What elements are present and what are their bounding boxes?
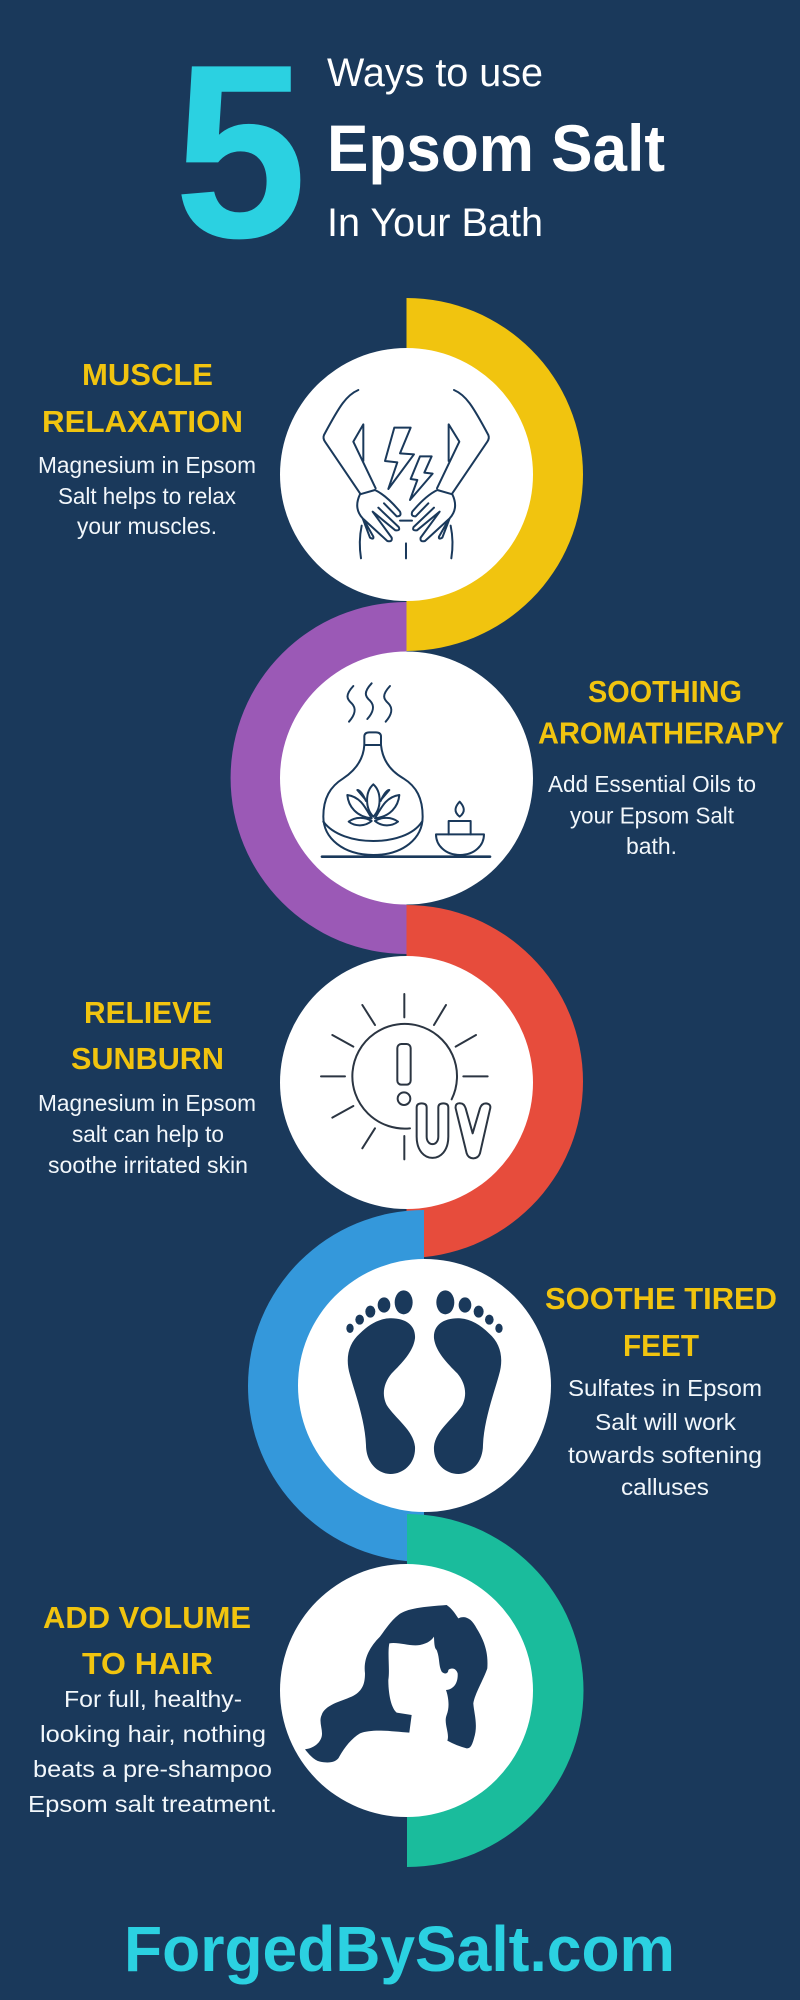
- heading: [42, 357, 243, 439]
- purple half ring: [231, 602, 406, 954]
- white circle: [280, 1564, 533, 1817]
- heading: RELAXATION: [42, 404, 243, 439]
- panel: soothing aromatherapy: [280, 652, 784, 904]
- title line: Epsom Salt: Epsom Salt: [327, 111, 665, 185]
- description: Sulfates in Epsom: [568, 1375, 762, 1401]
- heading: [545, 1281, 777, 1363]
- description: [568, 1375, 762, 1500]
- description: Magnesium in Epsom: [38, 1090, 256, 1116]
- panel: add volume to hair: [28, 1564, 533, 1817]
- description: [38, 452, 256, 539]
- description: [28, 1686, 277, 1817]
- icon: hands on lower back with lightning bolts: [324, 390, 489, 558]
- icon: footprints: [346, 1290, 503, 1474]
- description: your muscles.: [77, 513, 217, 539]
- heading: TO HAIR: [82, 1646, 213, 1681]
- big number 5: 5: [174, 12, 307, 290]
- heading: MUSCLE: [82, 357, 213, 392]
- description: looking hair, nothing: [40, 1721, 266, 1747]
- heading: SUNBURN: [71, 1041, 224, 1076]
- description: beats a pre-shampoo: [33, 1756, 272, 1782]
- heading: SOOTHE TIRED: [545, 1281, 777, 1316]
- red half ring: [406, 905, 583, 1258]
- description: Salt will work: [595, 1409, 737, 1435]
- description: calluses: [621, 1474, 709, 1500]
- footer website: ForgedBySalt.com: [124, 1913, 675, 1985]
- heading: ADD VOLUME: [43, 1600, 251, 1635]
- heading: [43, 1600, 251, 1681]
- title: [174, 12, 665, 290]
- white circle: [280, 348, 533, 601]
- icon: woman's head silhouette with flowing hair: [305, 1605, 487, 1762]
- white circle: [280, 652, 533, 904]
- description: Epsom salt treatment.: [28, 1791, 277, 1817]
- title line: In Your Bath: In Your Bath: [327, 201, 543, 245]
- description: [38, 1090, 256, 1178]
- panel: soothe tired feet: [298, 1259, 777, 1512]
- white circle: [280, 956, 533, 1209]
- icon: oil diffuser and candle: [322, 683, 490, 857]
- heading: RELIEVE: [84, 995, 212, 1030]
- description: soothe irritated skin: [48, 1152, 248, 1178]
- heading: [71, 995, 224, 1076]
- description: [548, 771, 756, 859]
- description: towards softening: [568, 1442, 762, 1468]
- heading: [538, 674, 784, 750]
- heading: FEET: [623, 1328, 699, 1363]
- description: For full, healthy-: [64, 1686, 242, 1712]
- description: Magnesium in Epsom: [38, 452, 256, 478]
- yellow half ring: [406, 298, 583, 651]
- description: your Epsom Salt: [570, 802, 735, 828]
- panel: muscle relaxation: [38, 348, 533, 601]
- panel: relieve sunburn: [38, 956, 533, 1209]
- description: bath.: [626, 833, 677, 859]
- title line: Ways to use: Ways to use: [327, 51, 543, 95]
- white circle: [298, 1259, 551, 1512]
- green half ring: [407, 1514, 584, 1867]
- icon: sun with UV warning: [321, 994, 490, 1159]
- description: salt can help to: [72, 1121, 224, 1147]
- description: Salt helps to relax: [58, 483, 236, 509]
- blue half ring: [248, 1210, 424, 1562]
- heading: SOOTHING: [588, 674, 742, 709]
- heading: AROMATHERAPY: [538, 716, 784, 750]
- description: Add Essential Oils to: [548, 771, 756, 797]
